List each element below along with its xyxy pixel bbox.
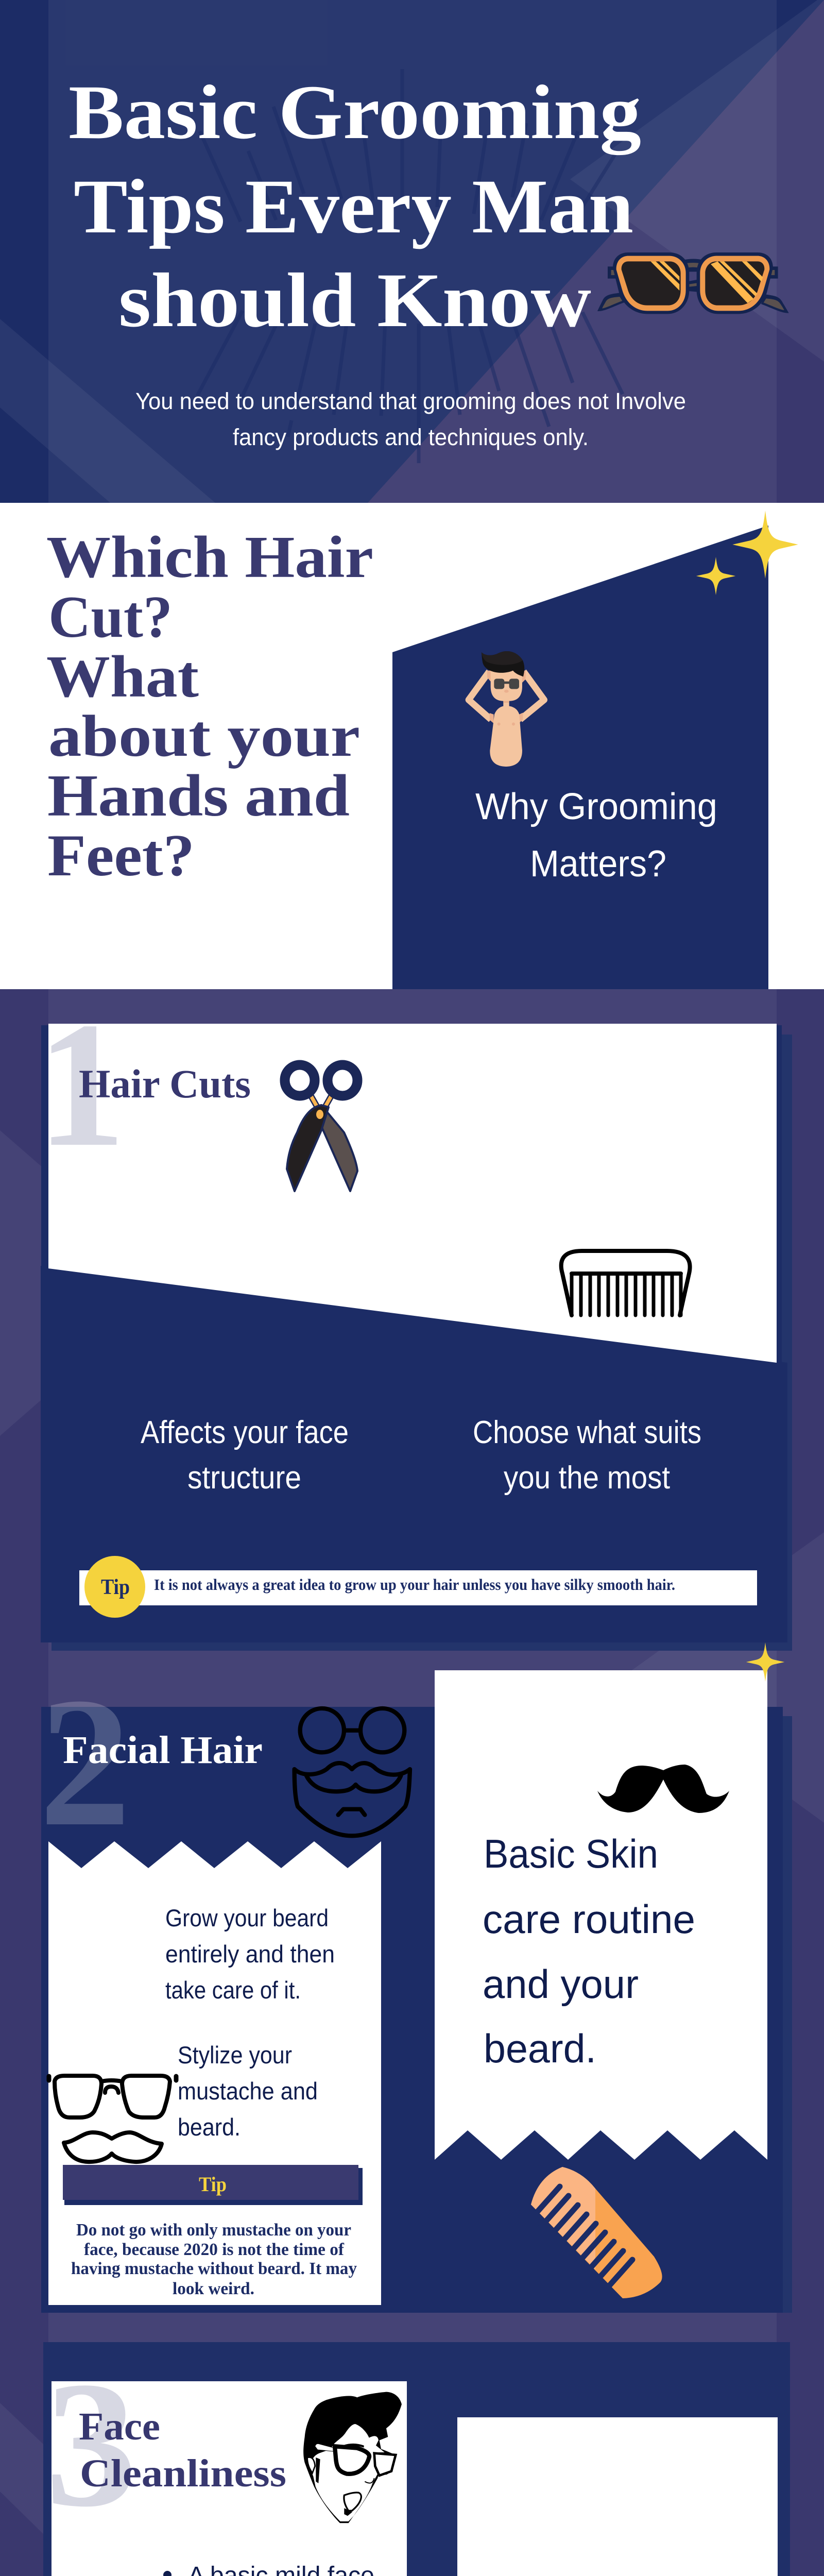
- text: stylize mustache: Stylize your: [178, 2041, 292, 2069]
- panel: why grooming matters: [392, 526, 768, 989]
- numeral 1: 1: [37, 986, 126, 1184]
- icon: glasses and mustache outline: [49, 2076, 176, 2162]
- tip bar: [79, 1556, 757, 1618]
- tip bar: Tip: [101, 1575, 130, 1599]
- text: grow your beard: take care of it.: [165, 1976, 301, 2004]
- text: basic skin care: and your: [483, 1961, 639, 2007]
- heading: which hair cut: Which Hair: [46, 524, 373, 590]
- text: why grooming matters: Why Grooming: [475, 786, 717, 827]
- title: should Know: [118, 258, 591, 343]
- subtitle: [135, 388, 686, 450]
- card: basic skin care routine: [435, 1670, 767, 2160]
- title: [68, 70, 641, 343]
- white upper area: [48, 1024, 777, 1363]
- text: grow your beard: [165, 1904, 335, 2004]
- text: stylize mustache: [178, 2041, 318, 2141]
- heading: which hair cut: Hands and: [47, 763, 350, 828]
- numeral 3: 3: [45, 2344, 137, 2544]
- panel: white intro band: [0, 503, 824, 989]
- heading: face cleanliness: Face: [79, 2405, 160, 2448]
- text: tip about mustache: having mustache without beard. It may: [71, 2259, 357, 2278]
- text: grow your beard: Grow your beard: [165, 1904, 329, 1931]
- text: tip about mustache: look weird.: [173, 2279, 254, 2298]
- text: stylize mustache: beard.: [178, 2113, 241, 2141]
- icon: small star: [746, 1642, 784, 1682]
- heading: face cleanliness: [79, 2405, 286, 2495]
- icon: orange comb: [530, 2167, 662, 2298]
- text: basic skin care: care routine: [483, 1896, 695, 1942]
- text: affects your face structure: Affects your face: [141, 1415, 349, 1450]
- icon: black mustache: [597, 1765, 729, 1813]
- text: affects your face structure: [141, 1415, 349, 1496]
- text: choose what suits you: Choose what suits: [473, 1415, 701, 1450]
- panel: section 1 hair cuts: [37, 986, 792, 1651]
- tip banner: Tip: [199, 2173, 227, 2196]
- card: grow your beard: [48, 1841, 381, 2305]
- tip banner: [63, 2165, 363, 2205]
- text: tip about mustache: face, because 2020 is not the time of: [84, 2240, 345, 2259]
- heading: which hair cut: What: [46, 644, 199, 709]
- text: basic skin care: beard.: [484, 2026, 596, 2071]
- heading: facial hair: Facial Hair: [63, 1728, 263, 1772]
- tip bar: It is not always a great idea to grow up your hair unless you have silky smooth hair.: [154, 1575, 675, 1594]
- heading: face cleanliness: Cleanliness: [80, 2452, 286, 2495]
- text: choose what suits you: you the most: [504, 1460, 670, 1496]
- title: Basic Grooming: [68, 70, 641, 155]
- heading: which hair cut: Feet?: [47, 823, 195, 888]
- heading: which hair cut: [46, 524, 373, 888]
- icon: comb: [561, 1251, 690, 1315]
- title: Tips Every Man: [74, 164, 633, 249]
- icon: small star: [696, 557, 735, 595]
- icon: large star: [732, 511, 798, 579]
- text: stylize mustache: mustache and: [178, 2077, 318, 2105]
- text: tip about mustache: Do not go with only mustache on your: [76, 2221, 351, 2240]
- numeral 2: 2: [39, 1659, 131, 1865]
- text: tip about mustache: [71, 2221, 357, 2298]
- text: affects your face structure: structure: [187, 1460, 301, 1496]
- heading: hair cuts: Hair Cuts: [79, 1061, 251, 1106]
- panel: section 3 face cleanliness: [43, 2342, 790, 2576]
- icon: sketched face with glasses: [303, 2392, 402, 2523]
- card: face cleanliness and face wash: [457, 2417, 778, 2576]
- heading: which hair cut: Cut?: [48, 584, 173, 650]
- text: choose what suits you: [473, 1415, 701, 1496]
- icon: scissors: [285, 1065, 357, 1191]
- icon: man with sunglasses: [469, 651, 544, 767]
- subtitle: fancy products and techniques only.: [233, 424, 589, 450]
- text: basic skin care: Basic Skin: [484, 1831, 658, 1876]
- heading: which hair cut: about your: [48, 703, 360, 769]
- icon: sunglasses: [597, 252, 789, 314]
- card: face cleanliness tips: [52, 2381, 407, 2576]
- text: basic skin care: [483, 1831, 695, 2071]
- subtitle: You need to understand that grooming does not Involve: [135, 388, 686, 414]
- panel: section 2 facial hair: [39, 1642, 792, 2313]
- text: grow your beard: entirely and then: [165, 1940, 335, 1968]
- text: why grooming matters: [475, 786, 717, 885]
- burst lines behind title: [197, 69, 623, 463]
- icon: beard and round glasses: [295, 1708, 410, 1836]
- text: why grooming matters: Matters?: [530, 843, 666, 885]
